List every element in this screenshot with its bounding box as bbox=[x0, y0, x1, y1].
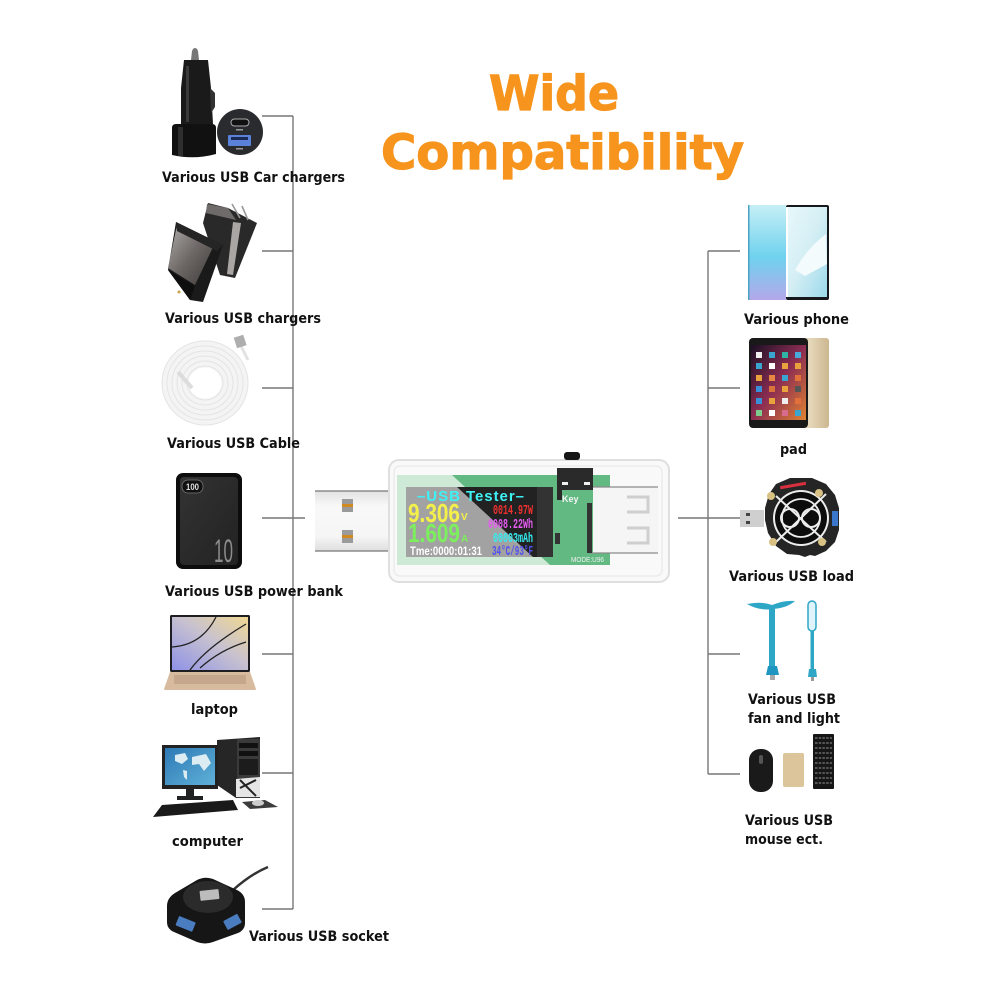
connector lines: right tree bbox=[678, 251, 740, 774]
screen heading: –USB Tester– bbox=[417, 488, 524, 505]
label: laptop: laptop bbox=[191, 702, 238, 718]
icon: USB load bbox=[740, 478, 839, 557]
USB-A female socket bbox=[587, 487, 658, 553]
icon: USB cable coil bbox=[162, 335, 248, 425]
label: car chargers: Various USB Car chargers bbox=[162, 170, 345, 186]
title bbox=[381, 66, 744, 181]
label: mouse etc: mouse ect. bbox=[745, 832, 823, 848]
label: USB load: Various USB load bbox=[729, 569, 854, 585]
label: fan and light: Various USB bbox=[748, 692, 836, 708]
voltage reading: 9.306 bbox=[408, 498, 460, 528]
icon: power bank: 10 bbox=[214, 533, 233, 569]
model label: MODE:U96 bbox=[571, 555, 604, 564]
label: mouse etc bbox=[745, 813, 833, 848]
energy reading: 0008.22Wh bbox=[488, 517, 533, 533]
icon: USB fan and light bbox=[747, 601, 817, 681]
label: phone: Various phone bbox=[744, 312, 849, 328]
USB plug bbox=[315, 491, 390, 551]
label: USB cable: Various USB Cable bbox=[167, 436, 300, 452]
LCD screen bbox=[406, 487, 553, 560]
timer: Tme:0000:01:31 bbox=[410, 544, 482, 558]
temperature reading: 34°C/93°F bbox=[492, 544, 533, 560]
current reading: 1.609 bbox=[408, 518, 460, 548]
icon: laptop bbox=[164, 615, 256, 690]
LCD screen: V bbox=[461, 512, 468, 523]
icon: tablet bbox=[749, 338, 829, 428]
side button and key: Key bbox=[562, 494, 579, 504]
label: USB chargers: Various USB chargers bbox=[165, 311, 321, 327]
label: mouse etc: Various USB bbox=[745, 813, 833, 829]
circuit board bbox=[397, 475, 610, 565]
LCD screen: A bbox=[461, 534, 468, 545]
icon: phones bbox=[748, 205, 829, 300]
side button and key bbox=[557, 452, 593, 504]
label: power bank: Various USB power bank bbox=[165, 584, 344, 600]
icon: USB hub bbox=[167, 867, 268, 944]
title: Compatibility bbox=[381, 125, 744, 181]
power reading: 0014.97W bbox=[493, 503, 533, 519]
icon: mouse, drive and keyboard bbox=[749, 734, 834, 792]
icon: power bank: 100 bbox=[186, 482, 199, 492]
transparent case bbox=[389, 460, 669, 582]
icon: USB chargers bbox=[168, 203, 257, 302]
charge reading: 00003mAh bbox=[493, 531, 533, 547]
icon: power bank bbox=[176, 473, 242, 569]
icon: car charger bbox=[172, 48, 263, 157]
label: USB socket: Various USB socket bbox=[249, 929, 389, 945]
USB tester device bbox=[315, 452, 669, 582]
label: pad: pad bbox=[780, 442, 807, 458]
icon: desktop computer bbox=[153, 737, 278, 817]
title: Wide bbox=[489, 66, 619, 122]
label: fan and light bbox=[748, 692, 840, 727]
connector lines: left tree bbox=[262, 116, 305, 909]
label: computer: computer bbox=[172, 834, 243, 850]
label: fan and light: fan and light bbox=[748, 711, 840, 727]
